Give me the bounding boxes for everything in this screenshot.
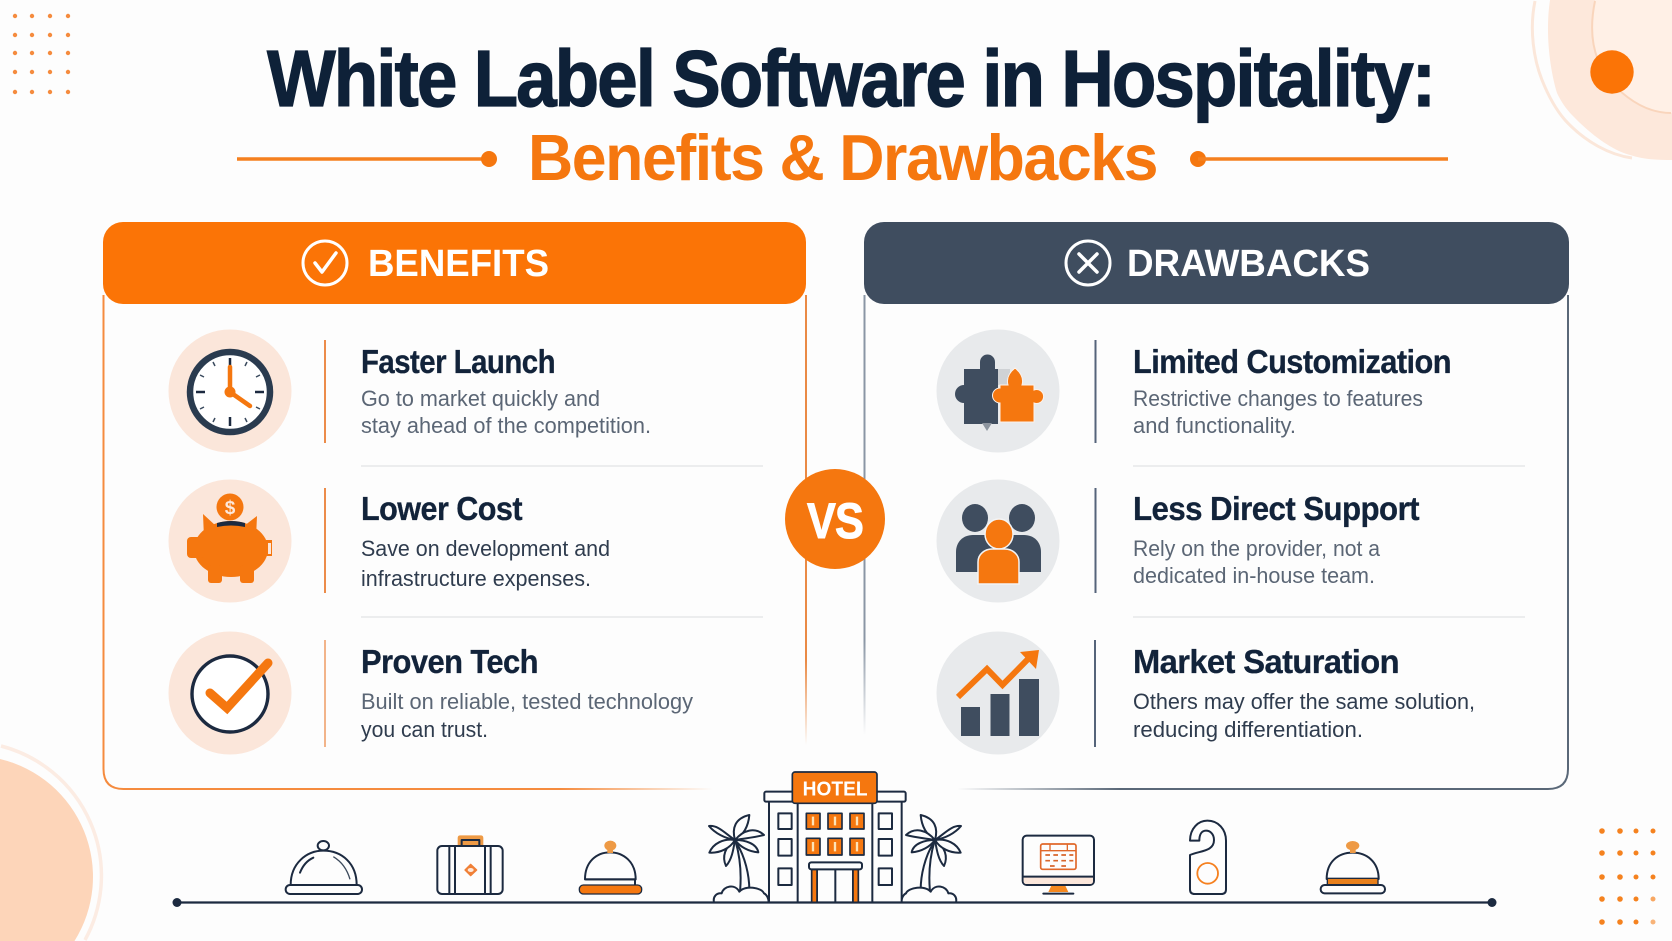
text: proven tech [361,643,693,742]
panel: benefits [103,222,806,789]
VS badge [785,469,885,569]
text: proven tech: Built on reliable, tested technology [361,689,693,714]
text: limited customization: Limited Customization [1133,343,1451,380]
icon: service bell [579,841,642,894]
text: faster launch: Faster Launch [361,343,555,380]
right palm [901,815,961,902]
decoration: top-left dots [13,14,70,94]
header: benefits [103,222,806,304]
icon: booking monitor [1023,836,1094,894]
text: limited customization: and functionality. [1133,413,1296,438]
text: proven tech: Proven Tech [361,643,538,680]
VS badge: VS [807,493,863,549]
text: faster launch [361,343,651,438]
panel border: benefits [104,295,806,789]
row: lower cost [168,480,610,602]
header: benefits: BENEFITS [368,243,549,285]
subtitle with side rules [237,121,1448,194]
text: market saturation: Market Saturation [1133,643,1399,680]
text: less direct support: Less Direct Support [1133,490,1420,527]
icon: hotel with palms [709,772,961,902]
row: less direct support [936,480,1420,602]
text: lower cost: Save on development and [361,536,610,561]
icon: food cloche [286,841,362,894]
text: lower cost [361,490,610,591]
icon: check mark [168,632,292,754]
icon: reception bell [1321,841,1385,893]
subtitle with side rules: Benefits & Drawbacks [528,121,1157,194]
header: drawbacks: DRAWBACKS [1127,243,1370,285]
left palm [709,815,769,902]
icon: door hanger [1190,821,1226,894]
row: proven tech [168,632,693,754]
text: market saturation: reducing differentiation. [1133,717,1363,742]
text: faster launch: Go to market quickly and [361,386,600,411]
icon: piggy bank: $ [225,498,236,519]
text: market saturation [1133,643,1475,742]
icon: growth chart [936,632,1060,754]
ground line [172,898,1496,907]
icon: suitcase [437,835,503,894]
text: lower cost: Lower Cost [361,490,523,527]
text: less direct support: dedicated in-house team. [1133,563,1375,588]
building: HOTEL [803,779,868,801]
title: White Label Software in Hospitality: [267,34,1434,123]
text: proven tech: you can trust. [361,717,488,742]
icon: clock [168,330,292,452]
icon: piggy bank [168,480,292,602]
row: market saturation [936,632,1475,754]
text: faster launch: stay ahead of the competition. [361,413,651,438]
icon: puzzle pieces [936,330,1060,452]
decoration: bottom-right dots [1599,828,1656,925]
panel: drawbacks [864,222,1569,789]
text: limited customization [1133,343,1451,438]
row: faster launch [168,330,651,452]
building [764,772,906,902]
header: drawbacks [864,222,1569,304]
text: less direct support: Rely on the provider, not a [1133,536,1381,561]
text: market saturation: Others may offer the same solution, [1133,689,1475,714]
text: lower cost: infrastructure expenses. [361,566,591,591]
text: less direct support [1133,490,1420,588]
icon: people [936,480,1060,602]
text: limited customization: Restrictive changes to features [1133,386,1423,411]
row: limited customization [936,330,1451,452]
decoration: bottom-left circle [0,746,101,941]
panel border: drawbacks [864,295,1568,789]
decoration: top-right circle with dot [1532,0,1672,160]
